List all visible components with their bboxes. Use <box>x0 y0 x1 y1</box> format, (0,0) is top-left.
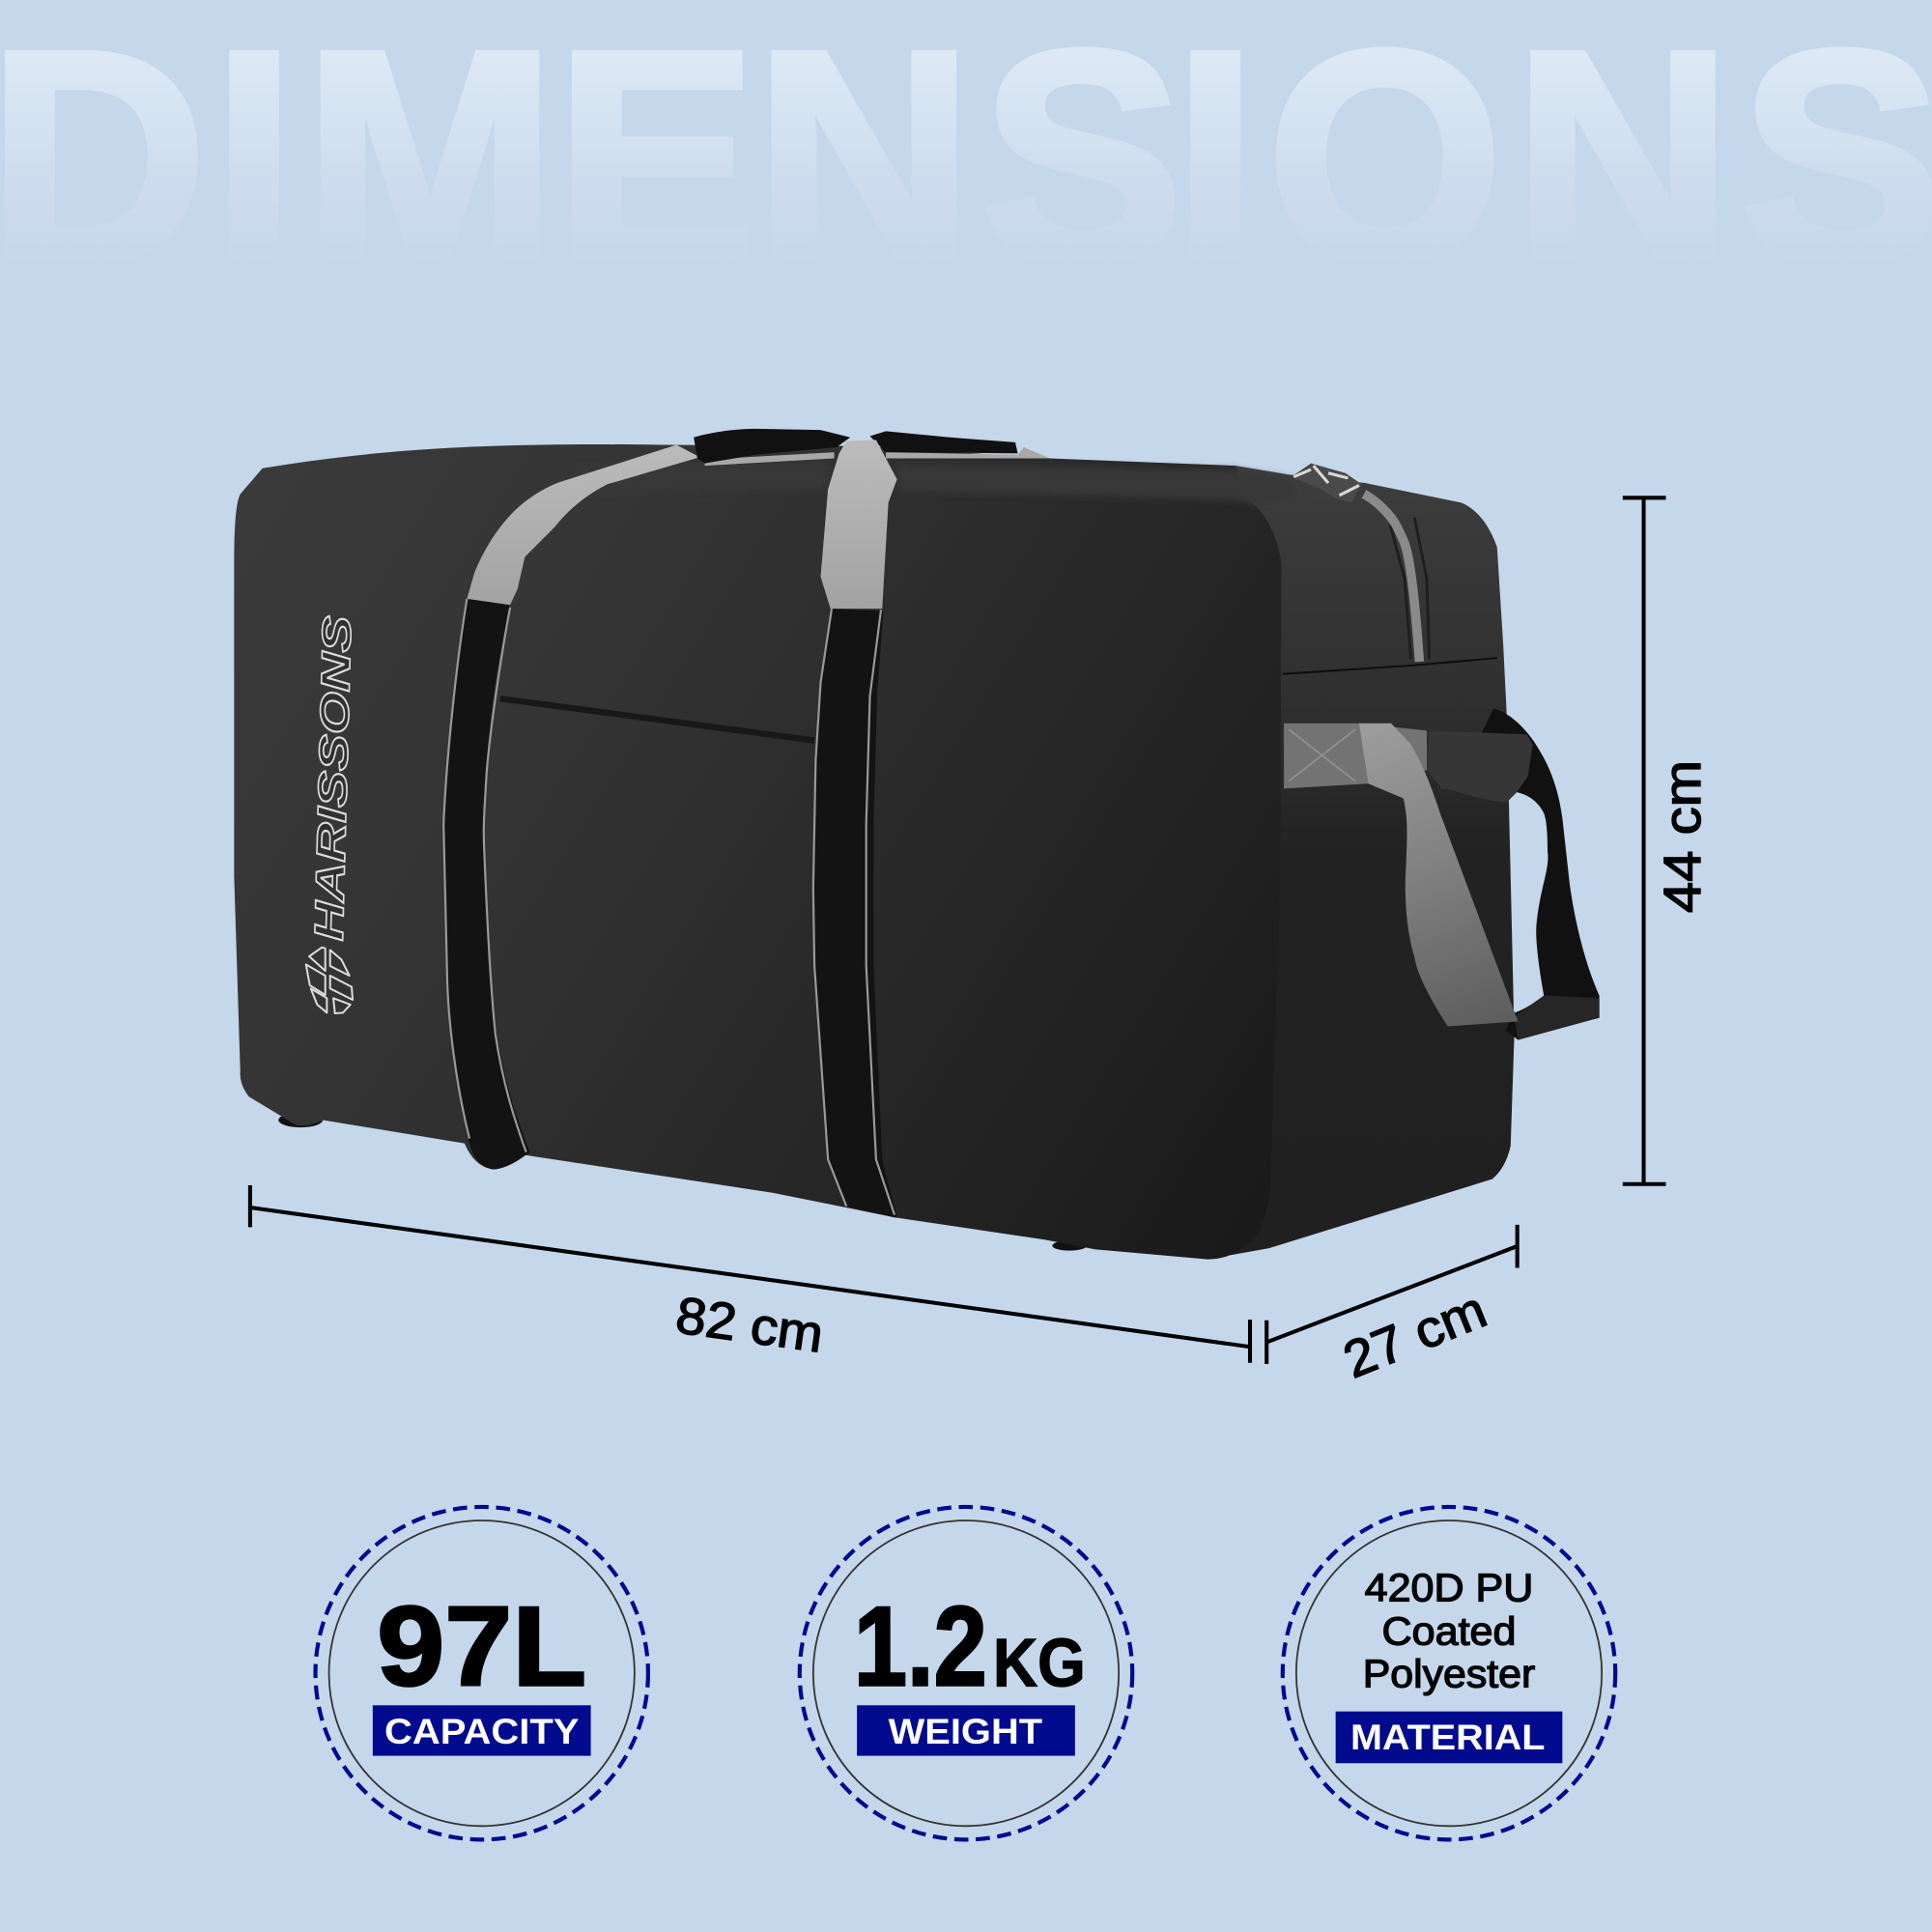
badge: material: Polyester <box>1363 1652 1535 1696</box>
side panel <box>1208 466 1515 1260</box>
dimension: length 82 cm: 82 cm <box>672 1287 827 1364</box>
right side handle: black strap <box>1479 708 1600 1040</box>
front panel <box>234 444 1282 1260</box>
stitch lines strap 2 <box>813 609 895 1215</box>
badge: capacity: CAPACITY <box>384 1712 580 1751</box>
black strap 2 <box>813 609 897 1217</box>
side zipper <box>1364 494 1419 662</box>
badge: weight: 1.2 <box>854 1582 987 1709</box>
grey strip under top handle <box>705 447 1050 466</box>
badge: weight: KG <box>993 1625 1086 1701</box>
brand logo <box>306 948 353 1013</box>
right side handle: lower fold <box>1515 996 1600 1040</box>
grey strap 1 <box>467 444 699 605</box>
duffel bag illustration <box>234 429 1600 1260</box>
badge: material: 420D PU <box>1365 1565 1533 1609</box>
bag feet <box>278 1113 1087 1251</box>
badge: capacity: 97L <box>377 1582 586 1709</box>
front pocket line <box>500 698 814 741</box>
brand name: HARISSONS <box>306 615 359 942</box>
side seam <box>1283 658 1497 674</box>
top handle <box>694 429 1018 464</box>
badge: material: Coated <box>1381 1608 1517 1653</box>
dimension: height 44 cm <box>1623 497 1712 1184</box>
dimension: depth 27 cm: 27 cm <box>1336 1281 1494 1389</box>
black strap 1 <box>443 599 529 1169</box>
grey strap 2 <box>820 440 897 609</box>
top face highlight <box>579 462 1300 505</box>
dimension: height 44 cm: 44 cm <box>1655 760 1712 913</box>
badge: weight <box>800 1507 1132 1839</box>
zipper shadow <box>1390 518 1430 659</box>
right side handle: grey diagonal strap <box>1359 724 1518 1026</box>
badge: weight: WEIGHT <box>889 1712 1043 1751</box>
dimension: depth 27 cm <box>1266 1225 1518 1389</box>
dimension: length 82 cm <box>250 1185 1250 1364</box>
stitch lines strap 1 <box>443 599 526 1152</box>
badge: material <box>1283 1507 1615 1839</box>
zipper pulls <box>1292 464 1361 502</box>
badge: material: MATERIAL <box>1350 1718 1545 1757</box>
badge: capacity <box>316 1507 648 1839</box>
right side handle: fabric loop <box>1427 730 1533 802</box>
right side handle: grey horizontal webbing <box>1284 724 1427 788</box>
